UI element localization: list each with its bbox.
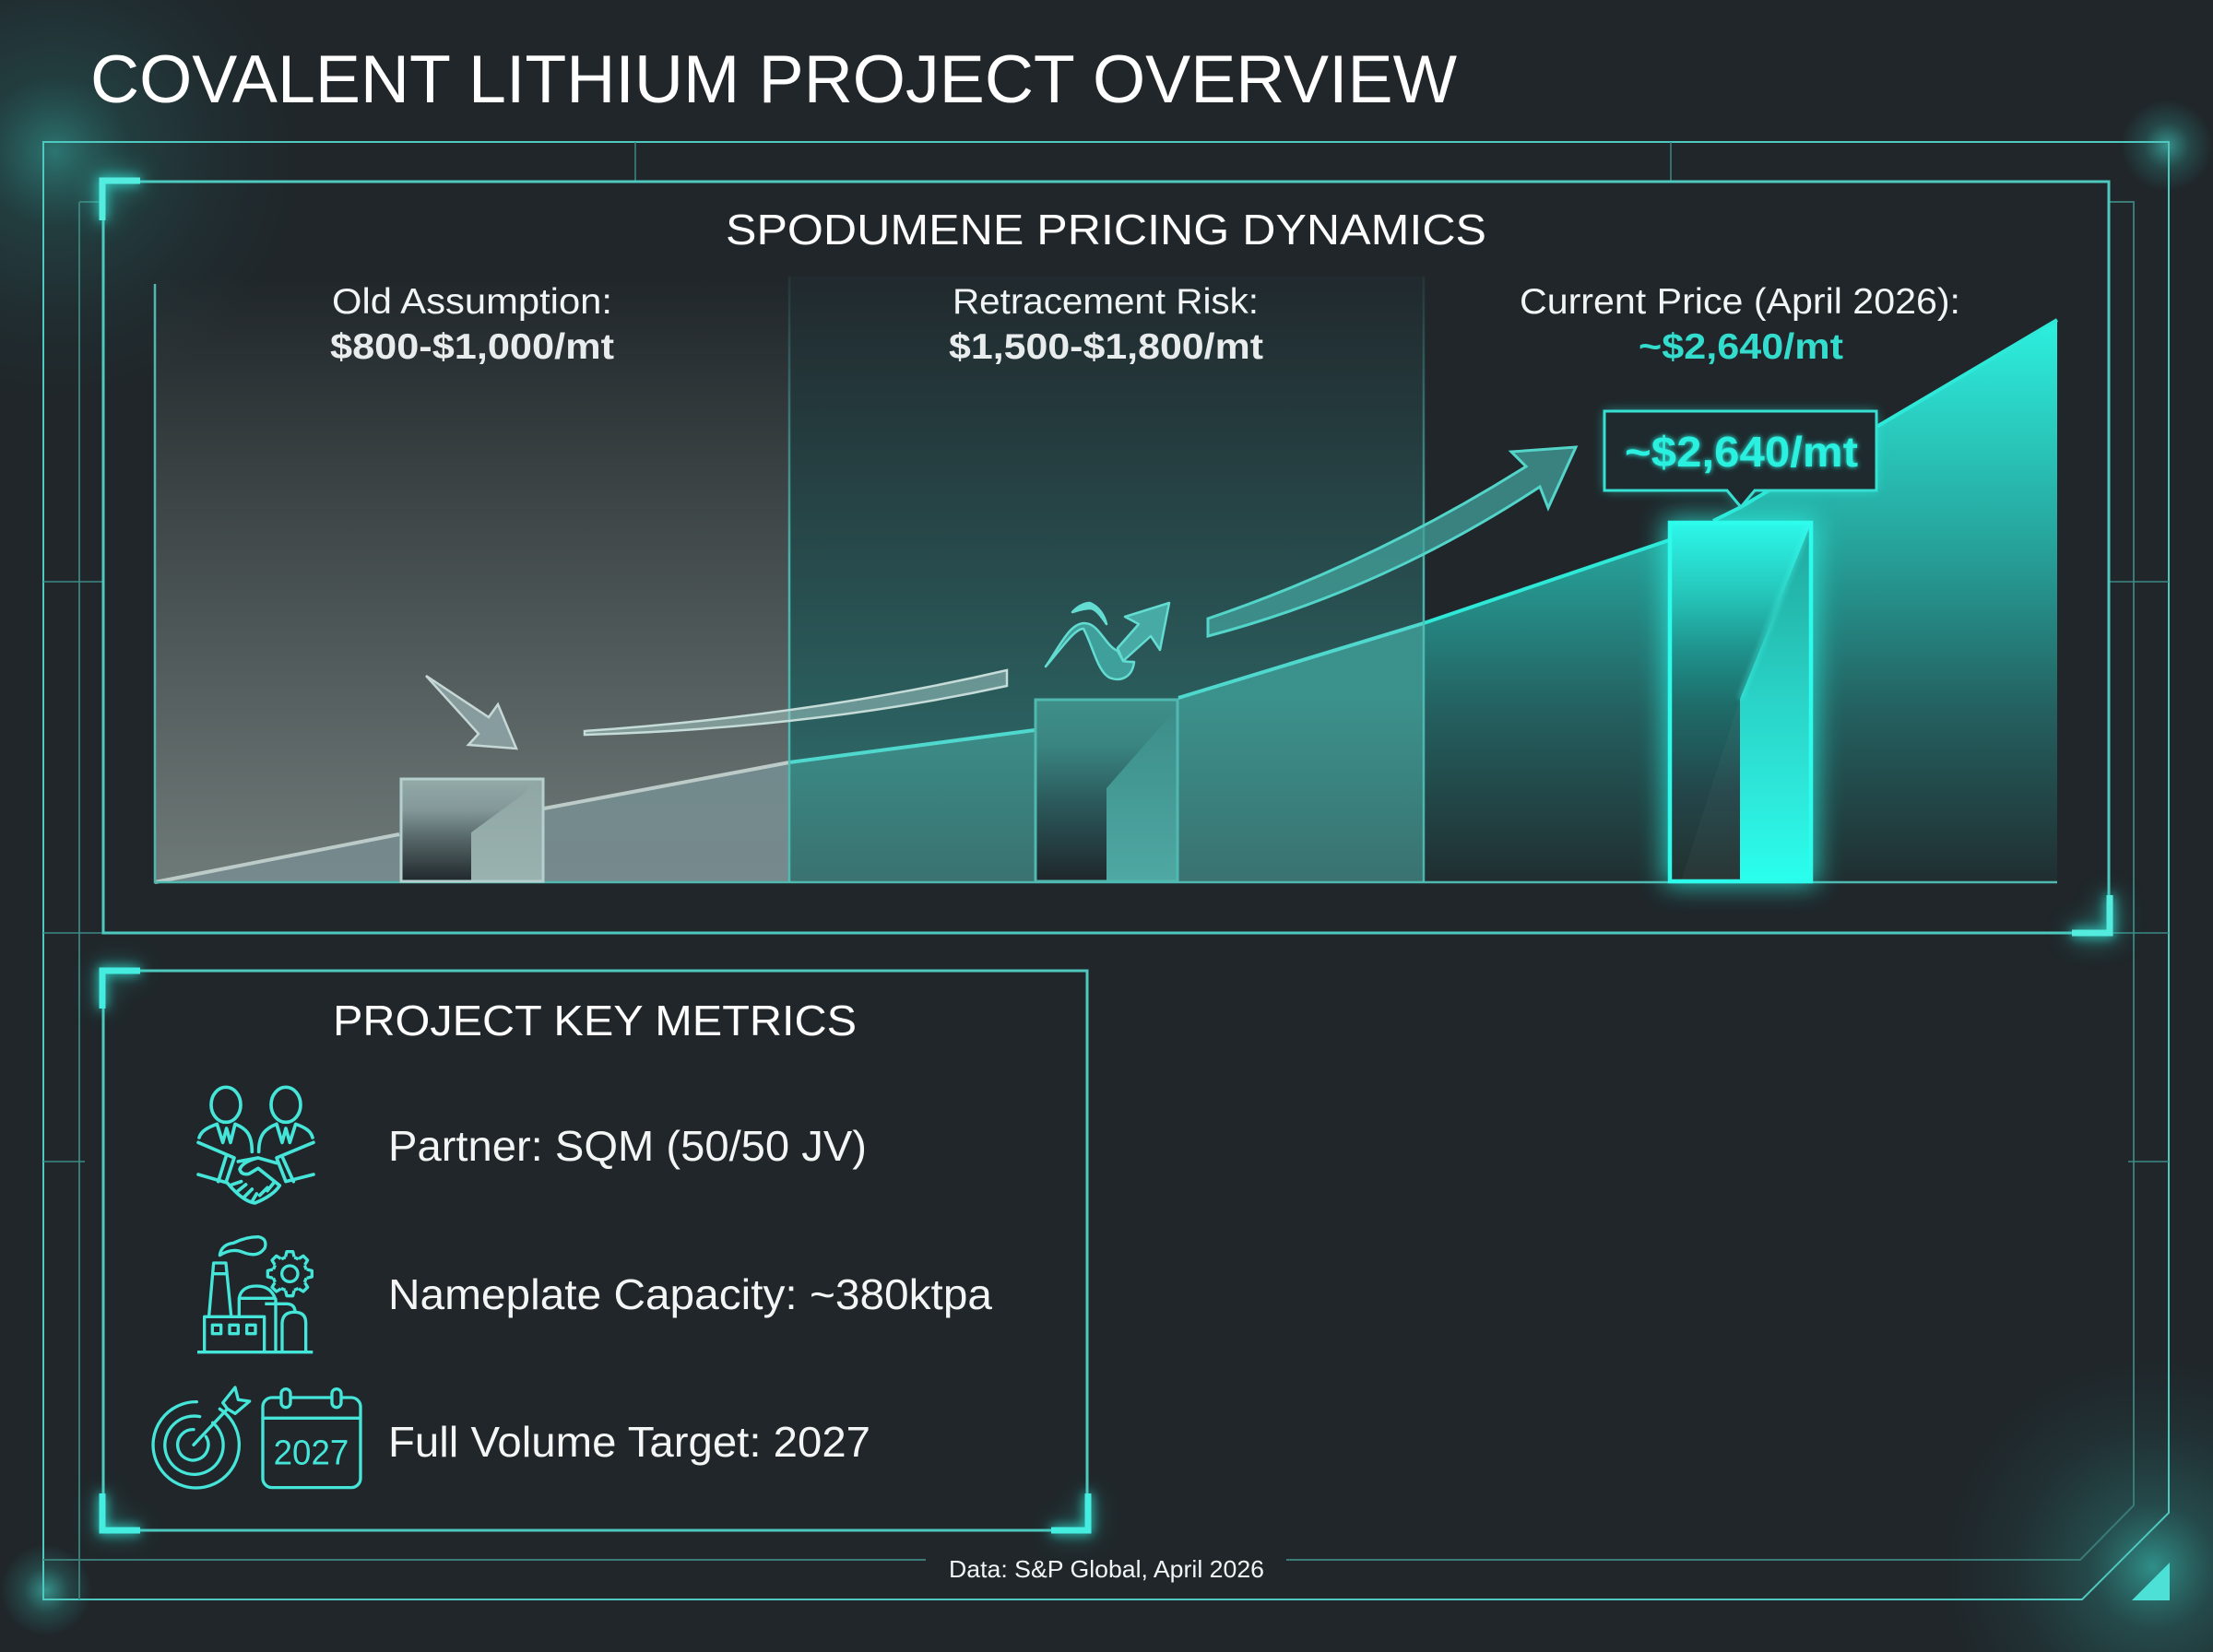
arrow: thin swoosh: [585, 670, 1007, 735]
text: capacity: Nameplate Capacity: ~380ktpa: [388, 1270, 992, 1318]
icon: target and calendar: [153, 1387, 361, 1488]
label: old assumption: Old Assumption:: [332, 282, 612, 322]
panel frame: [103, 971, 1087, 1530]
corner brackets: [102, 971, 1088, 1530]
footer source: Data: S&P Global, April 2026: [949, 1555, 1264, 1583]
arrow: down into old assumption: [426, 676, 516, 749]
text: partner: Partner: SQM (50/50 JV): [388, 1122, 867, 1170]
bar: current price: [1664, 518, 1817, 885]
label: retracement risk: $1,500-$1,800/mt: [949, 327, 1263, 367]
label: current price: ~$2,640/mt: [1639, 327, 1843, 367]
label: old assumption: [330, 282, 614, 367]
label: old assumption: $800-$1,000/mt: [330, 327, 614, 367]
bar: old assumption: [401, 779, 543, 881]
label: retracement risk: [949, 282, 1263, 367]
corner brackets: [102, 181, 2110, 933]
text: target: Full Volume Target: 2027: [388, 1418, 870, 1466]
panel: project key metrics: [102, 971, 1088, 1530]
price line: [155, 320, 2057, 882]
bar: retracement risk: [1035, 700, 1178, 881]
arrow: large rising arrow: [1208, 447, 1576, 636]
callout: current price: ~$2,640/mt: [1625, 428, 1858, 476]
callout: current price: [1604, 411, 1876, 507]
icon: handshake partners: [198, 1087, 314, 1203]
heading: SPODUMENE PRICING DYNAMICS: [726, 206, 1486, 254]
axes and dividers: [155, 277, 2057, 882]
heading: PROJECT KEY METRICS: [333, 997, 857, 1044]
column backgrounds: [155, 277, 1424, 882]
icon: factory and gear: [197, 1237, 313, 1352]
label: current price: [1520, 282, 1960, 367]
chart: [155, 277, 2057, 885]
panel frame: [103, 182, 2109, 933]
icon: target and calendar: 2027: [274, 1434, 349, 1472]
icon: volatility wave arrow: [1046, 603, 1169, 679]
label: retracement risk: Retracement Risk:: [953, 282, 1259, 322]
area under price line: [155, 320, 2057, 882]
title: COVALENT LITHIUM PROJECT OVERVIEW: [90, 42, 1457, 117]
label: current price: Current Price (April 2026):: [1520, 282, 1960, 322]
corner triangle accent: [2132, 1563, 2170, 1600]
panel: spodumene pricing dynamics: [102, 181, 2110, 933]
